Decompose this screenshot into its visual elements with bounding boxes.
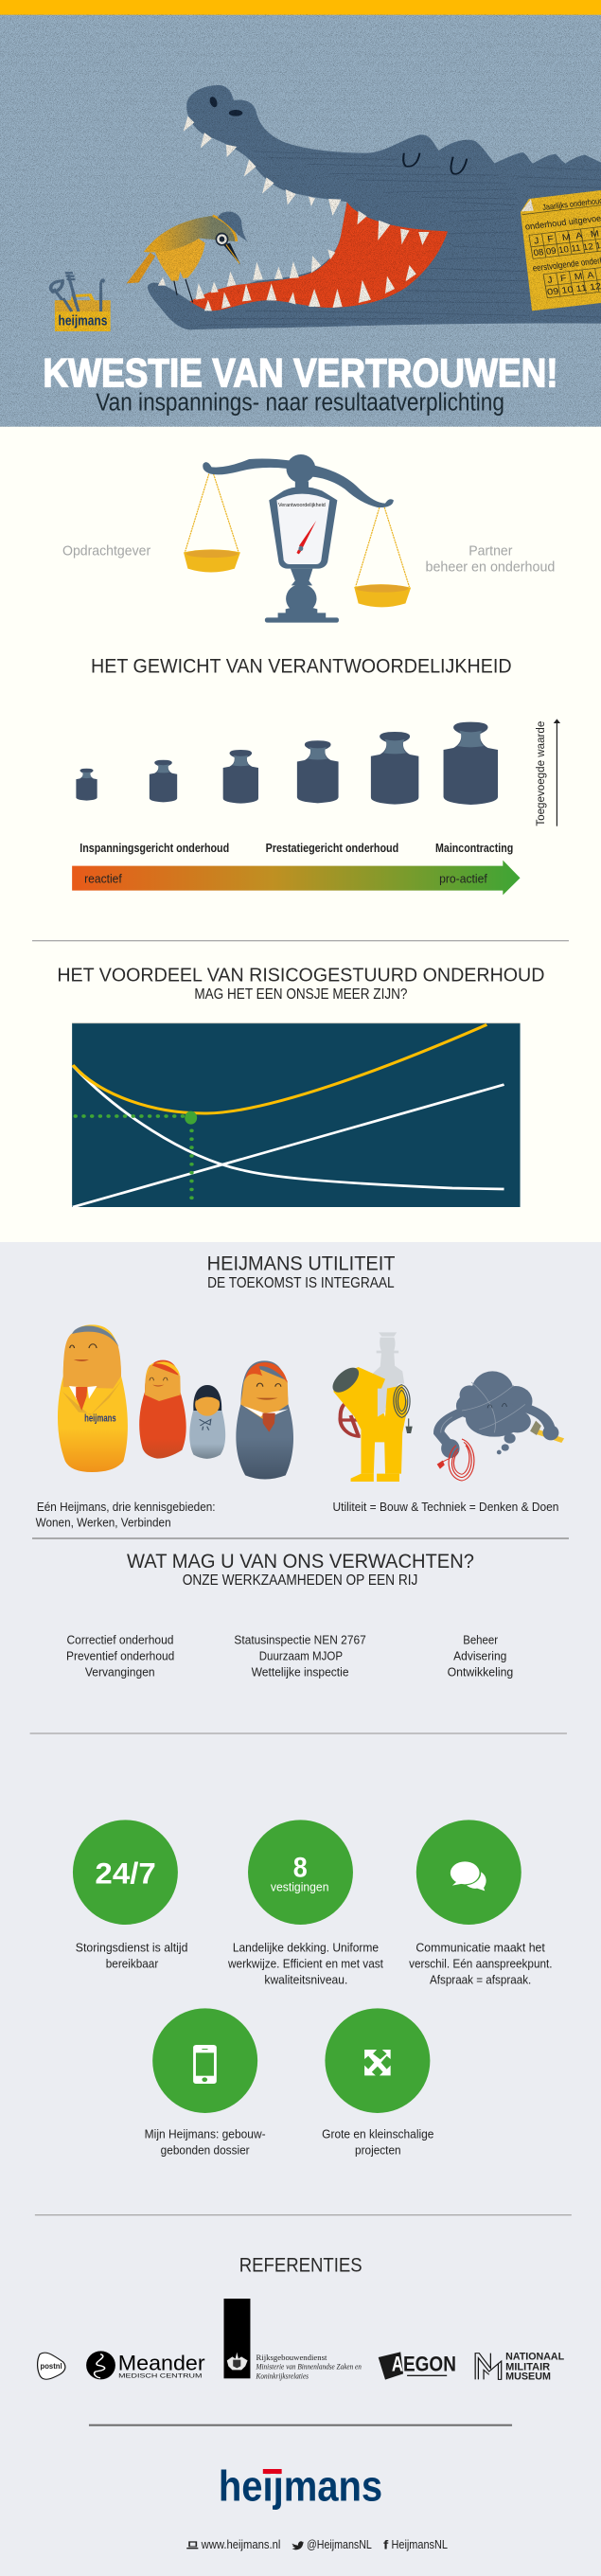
feature: 24/7: 24/7 <box>95 1856 156 1891</box>
feature: mobile dossier: gebonden dossier <box>161 2144 250 2158</box>
nesting doll: red <box>139 1360 186 1459</box>
logo: PostNL: postnl <box>41 2362 62 2372</box>
gradient arrow: pro-actief <box>439 873 487 886</box>
logo: Rijksgebouwendienst: Ministerie van Binnenlandse Zaken en <box>256 2363 362 2372</box>
panel: balance scale and weights <box>62 454 560 895</box>
logo: Heijmans: heijmans <box>219 2462 382 2511</box>
subheading: DE TOEKOMST IS INTEGRAAL <box>207 1274 395 1291</box>
logo: Nationaal Militair Museum: MILITAIR <box>505 2360 550 2372</box>
logo: Meander: Meander <box>118 2353 205 2375</box>
feature: 24/7 <box>73 1820 187 1971</box>
subheading: ONZE WERKZAAMHEDEN OP EEN RIJ <box>183 1572 417 1589</box>
line chart <box>72 1023 521 1207</box>
footer: facebook: HeijmansNL <box>391 2537 448 2551</box>
panel: references and footer <box>35 2214 572 2552</box>
panel: risk-driven maintenance <box>32 940 569 1207</box>
paper grain over the illustration <box>0 15 601 427</box>
list: management: Beheer <box>463 1634 498 1647</box>
logo: Meander: MEDISCH CENTRUM <box>118 2372 202 2379</box>
caption: one Heijmans <box>36 1501 216 1530</box>
panel: Heijmans Utiliteit <box>32 1252 569 1539</box>
labels: maintenance types: Inspanningsgericht onderhoud <box>80 841 229 855</box>
labels: maintenance types: Prestatiegericht onderhoud <box>266 841 398 855</box>
feature: communication: Communicatie maakt het <box>415 1942 546 1955</box>
labels: maintenance types: Maincontracting <box>435 841 513 855</box>
feature: 8 branches: 8 <box>293 1852 308 1884</box>
list: inspections <box>234 1634 366 1679</box>
heading: REFERENTIES <box>239 2255 362 2277</box>
list: inspections: Wettelijke inspectie <box>252 1666 349 1679</box>
heading: HEIJMANS UTILITEIT <box>207 1252 396 1275</box>
list: management <box>448 1634 513 1679</box>
balance scale: Verantwoordelijkheid <box>278 503 326 508</box>
balance scale <box>184 454 411 623</box>
logo: Meander <box>86 2351 205 2379</box>
gradient arrow: reactief <box>84 873 122 886</box>
maintenance note on the crocodile <box>521 190 601 311</box>
footer: website <box>186 2537 280 2551</box>
logo: Aegon: EGON <box>403 2353 456 2376</box>
list: inspections: Statusinspectie NEN 2767 <box>234 1634 366 1647</box>
logo: PostNL <box>38 2353 65 2379</box>
list: inspections: Duurzaam MJOP <box>259 1650 343 1663</box>
caption: one Heijmans: Wonen, Werken, Verbinden <box>36 1517 171 1530</box>
list: maintenance: Vervangingen <box>85 1666 155 1679</box>
list: management: Ontwikkeling <box>448 1666 513 1679</box>
feature: 8 branches: vestigingen <box>271 1880 328 1893</box>
nesting doll: grey suit <box>236 1360 293 1479</box>
panel: hero <box>0 15 601 427</box>
logo: Rijksgebouwendienst: Koninkrijksrelaties <box>256 2372 309 2381</box>
subheading: MAG HET EEN ONSJE MEER ZIJN? <box>194 986 407 1003</box>
feature: communication: Afspraak = afspraak. <box>430 1974 531 1987</box>
page background: light grey <box>0 1242 601 2576</box>
feature: communication <box>409 1820 553 1987</box>
feature: project scale: Grote en kleinschalige <box>322 2128 433 2141</box>
logo: Rijksgebouwendienst <box>224 2299 362 2381</box>
feature: 24/7: Storingsdienst is altijd <box>76 1942 187 1955</box>
croc skin texture <box>200 151 601 325</box>
crocodile <box>148 85 601 329</box>
logo: Nationaal Militair Museum: MUSEUM <box>505 2371 551 2382</box>
label: partner: beheer en onderhoud <box>426 560 555 575</box>
page background: cream <box>0 0 601 1242</box>
label: partner: Partner <box>468 543 513 559</box>
feature: communication: verschil. Eén aanspreekpunt. <box>409 1958 553 1971</box>
nesting doll: large with logo <box>58 1324 128 1472</box>
toolbox with tools <box>51 273 111 331</box>
heading: WAT MAG U VAN ONS VERWACHTEN? <box>127 1550 474 1572</box>
background gap in jaw <box>168 159 346 301</box>
caption: one Heijmans: Eén Heijmans, drie kennisgebieden: <box>37 1501 216 1515</box>
logo: Aegon: A <box>392 2353 403 2376</box>
weights row <box>76 722 498 805</box>
feature: 24/7: bereikbaar <box>106 1958 158 1971</box>
feature: 8 branches <box>227 1820 384 1987</box>
feature: 8 branches: Landelijke dekking. Uniforme <box>233 1942 379 1955</box>
footer: facebook: f <box>383 2539 388 2552</box>
logo: Rijksgebouwendienst: Rijksgebouwendienst <box>256 2354 327 2363</box>
feature: mobile dossier <box>145 2008 266 2158</box>
teeth <box>158 116 430 311</box>
list: management: Advisering <box>453 1650 506 1663</box>
gradient arrow <box>72 861 521 895</box>
logo: Nationaal Militair Museum <box>475 2351 564 2382</box>
cement mixer figure <box>327 1332 413 1482</box>
labels: maintenance types <box>80 841 513 855</box>
feature: mobile dossier: Mijn Heijmans: gebouw- <box>145 2128 266 2141</box>
mouth interior <box>189 202 448 311</box>
thinking cloud figure <box>437 1371 564 1481</box>
list: maintenance: Preventief onderhoud <box>66 1650 174 1663</box>
feature: project scale: projecten <box>355 2144 401 2158</box>
axis: added value: Toegevoegde waarde <box>535 721 547 826</box>
bird with cap <box>127 212 247 302</box>
panel: what to expect <box>30 1550 567 1734</box>
list: maintenance: Correctief onderhoud <box>66 1634 173 1647</box>
footer: twitter: @HeijmansNL <box>307 2537 372 2551</box>
label: partner <box>426 543 555 575</box>
top yellow bar <box>0 0 601 15</box>
nesting doll: large with logo: heijmans <box>84 1412 116 1424</box>
label: client: Opdrachtgever <box>62 543 151 559</box>
feature: 8 branches: kwaliteitsniveau. <box>264 1974 347 1987</box>
list: maintenance <box>66 1634 174 1679</box>
footer: facebook <box>383 2537 448 2552</box>
feature: project scale <box>322 2008 433 2158</box>
panel: green feature circles <box>73 1820 553 2158</box>
feature: 8 branches: werkwijze. Efficient en met vast <box>227 1958 384 1971</box>
footer: twitter <box>292 2537 372 2551</box>
footer: website: www.heijmans.nl <box>201 2537 280 2551</box>
logo: Nationaal Militair Museum: NATIONAAL <box>505 2351 564 2362</box>
logo: Aegon <box>379 2352 456 2380</box>
nesting doll: small blue <box>189 1385 225 1459</box>
axis: added value <box>535 719 560 826</box>
toolbox with tools: heijmans <box>59 313 107 329</box>
nostrils and eyes <box>208 96 467 174</box>
